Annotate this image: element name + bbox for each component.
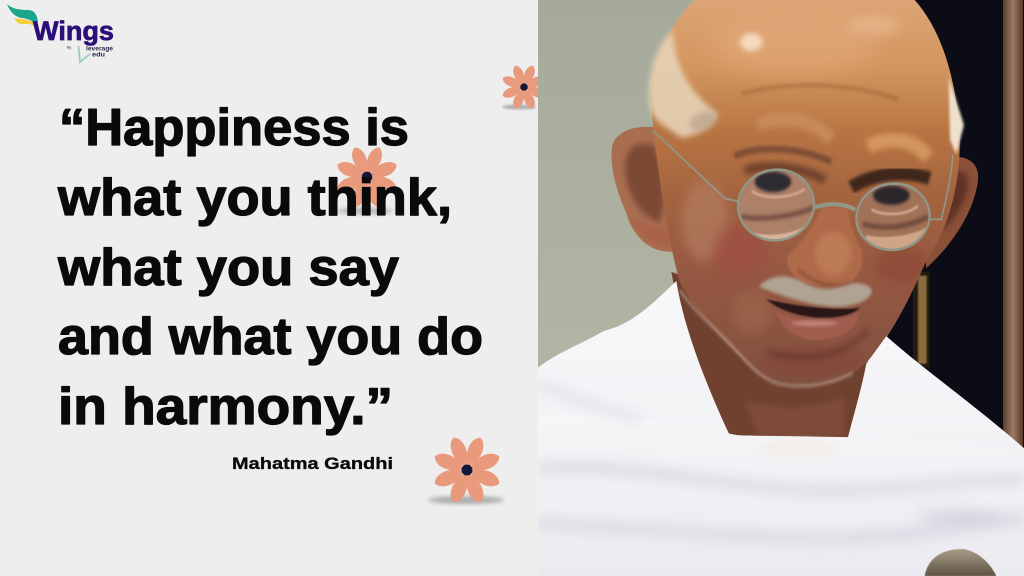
right ear (921, 157, 978, 268)
cheeks (712, 226, 766, 270)
attribution: Mahatma Gandhi (232, 455, 393, 473)
grey hair right (949, 77, 964, 154)
quote text: what you think, (57, 169, 452, 227)
white shawl (538, 281, 1024, 576)
logo by text: by (67, 46, 71, 50)
flower: bottom right of quote (428, 435, 504, 505)
forehead wrinkles (741, 85, 898, 99)
left lens interior (739, 170, 813, 239)
leverage edu mark (78, 46, 90, 62)
portrait photo (538, 0, 1024, 576)
forehead shine (717, 25, 867, 76)
left ear (612, 127, 675, 252)
lower face folds (736, 296, 767, 331)
glasses (653, 130, 953, 253)
dark curtain and frame (871, 0, 1024, 459)
moustache (759, 276, 872, 307)
grey hair left (649, 29, 718, 138)
leverage edu text: leverage (86, 46, 113, 52)
logo: Wings by leverage edu: edu (92, 52, 105, 58)
chin highlight line (680, 290, 853, 386)
head (649, 0, 964, 386)
logo: Wings by leverage edu (7, 4, 114, 62)
upper cheek skin (681, 180, 728, 261)
quote text: and what you do (58, 308, 483, 366)
logo ribbon icon (7, 4, 38, 26)
quote text: in harmony.” (58, 378, 393, 436)
shawl lower drape (728, 434, 758, 436)
quote text: what you say (57, 239, 399, 297)
quote text: “Happiness is (59, 99, 409, 157)
logo wordmark: Wings (33, 16, 114, 46)
mouth and lips (766, 299, 860, 340)
background panel (0, 0, 538, 576)
photo background wall (538, 0, 872, 368)
right lens interior (858, 185, 928, 249)
quote text (57, 99, 483, 436)
flower: top right, clipped by photo (502, 66, 538, 111)
neck (671, 272, 868, 441)
shawl fold shadows (538, 378, 1024, 544)
shawl pin / button at bottom (925, 549, 996, 576)
nose (787, 208, 862, 287)
flower: behind quote text (335, 145, 399, 214)
eyebrows (735, 149, 831, 162)
